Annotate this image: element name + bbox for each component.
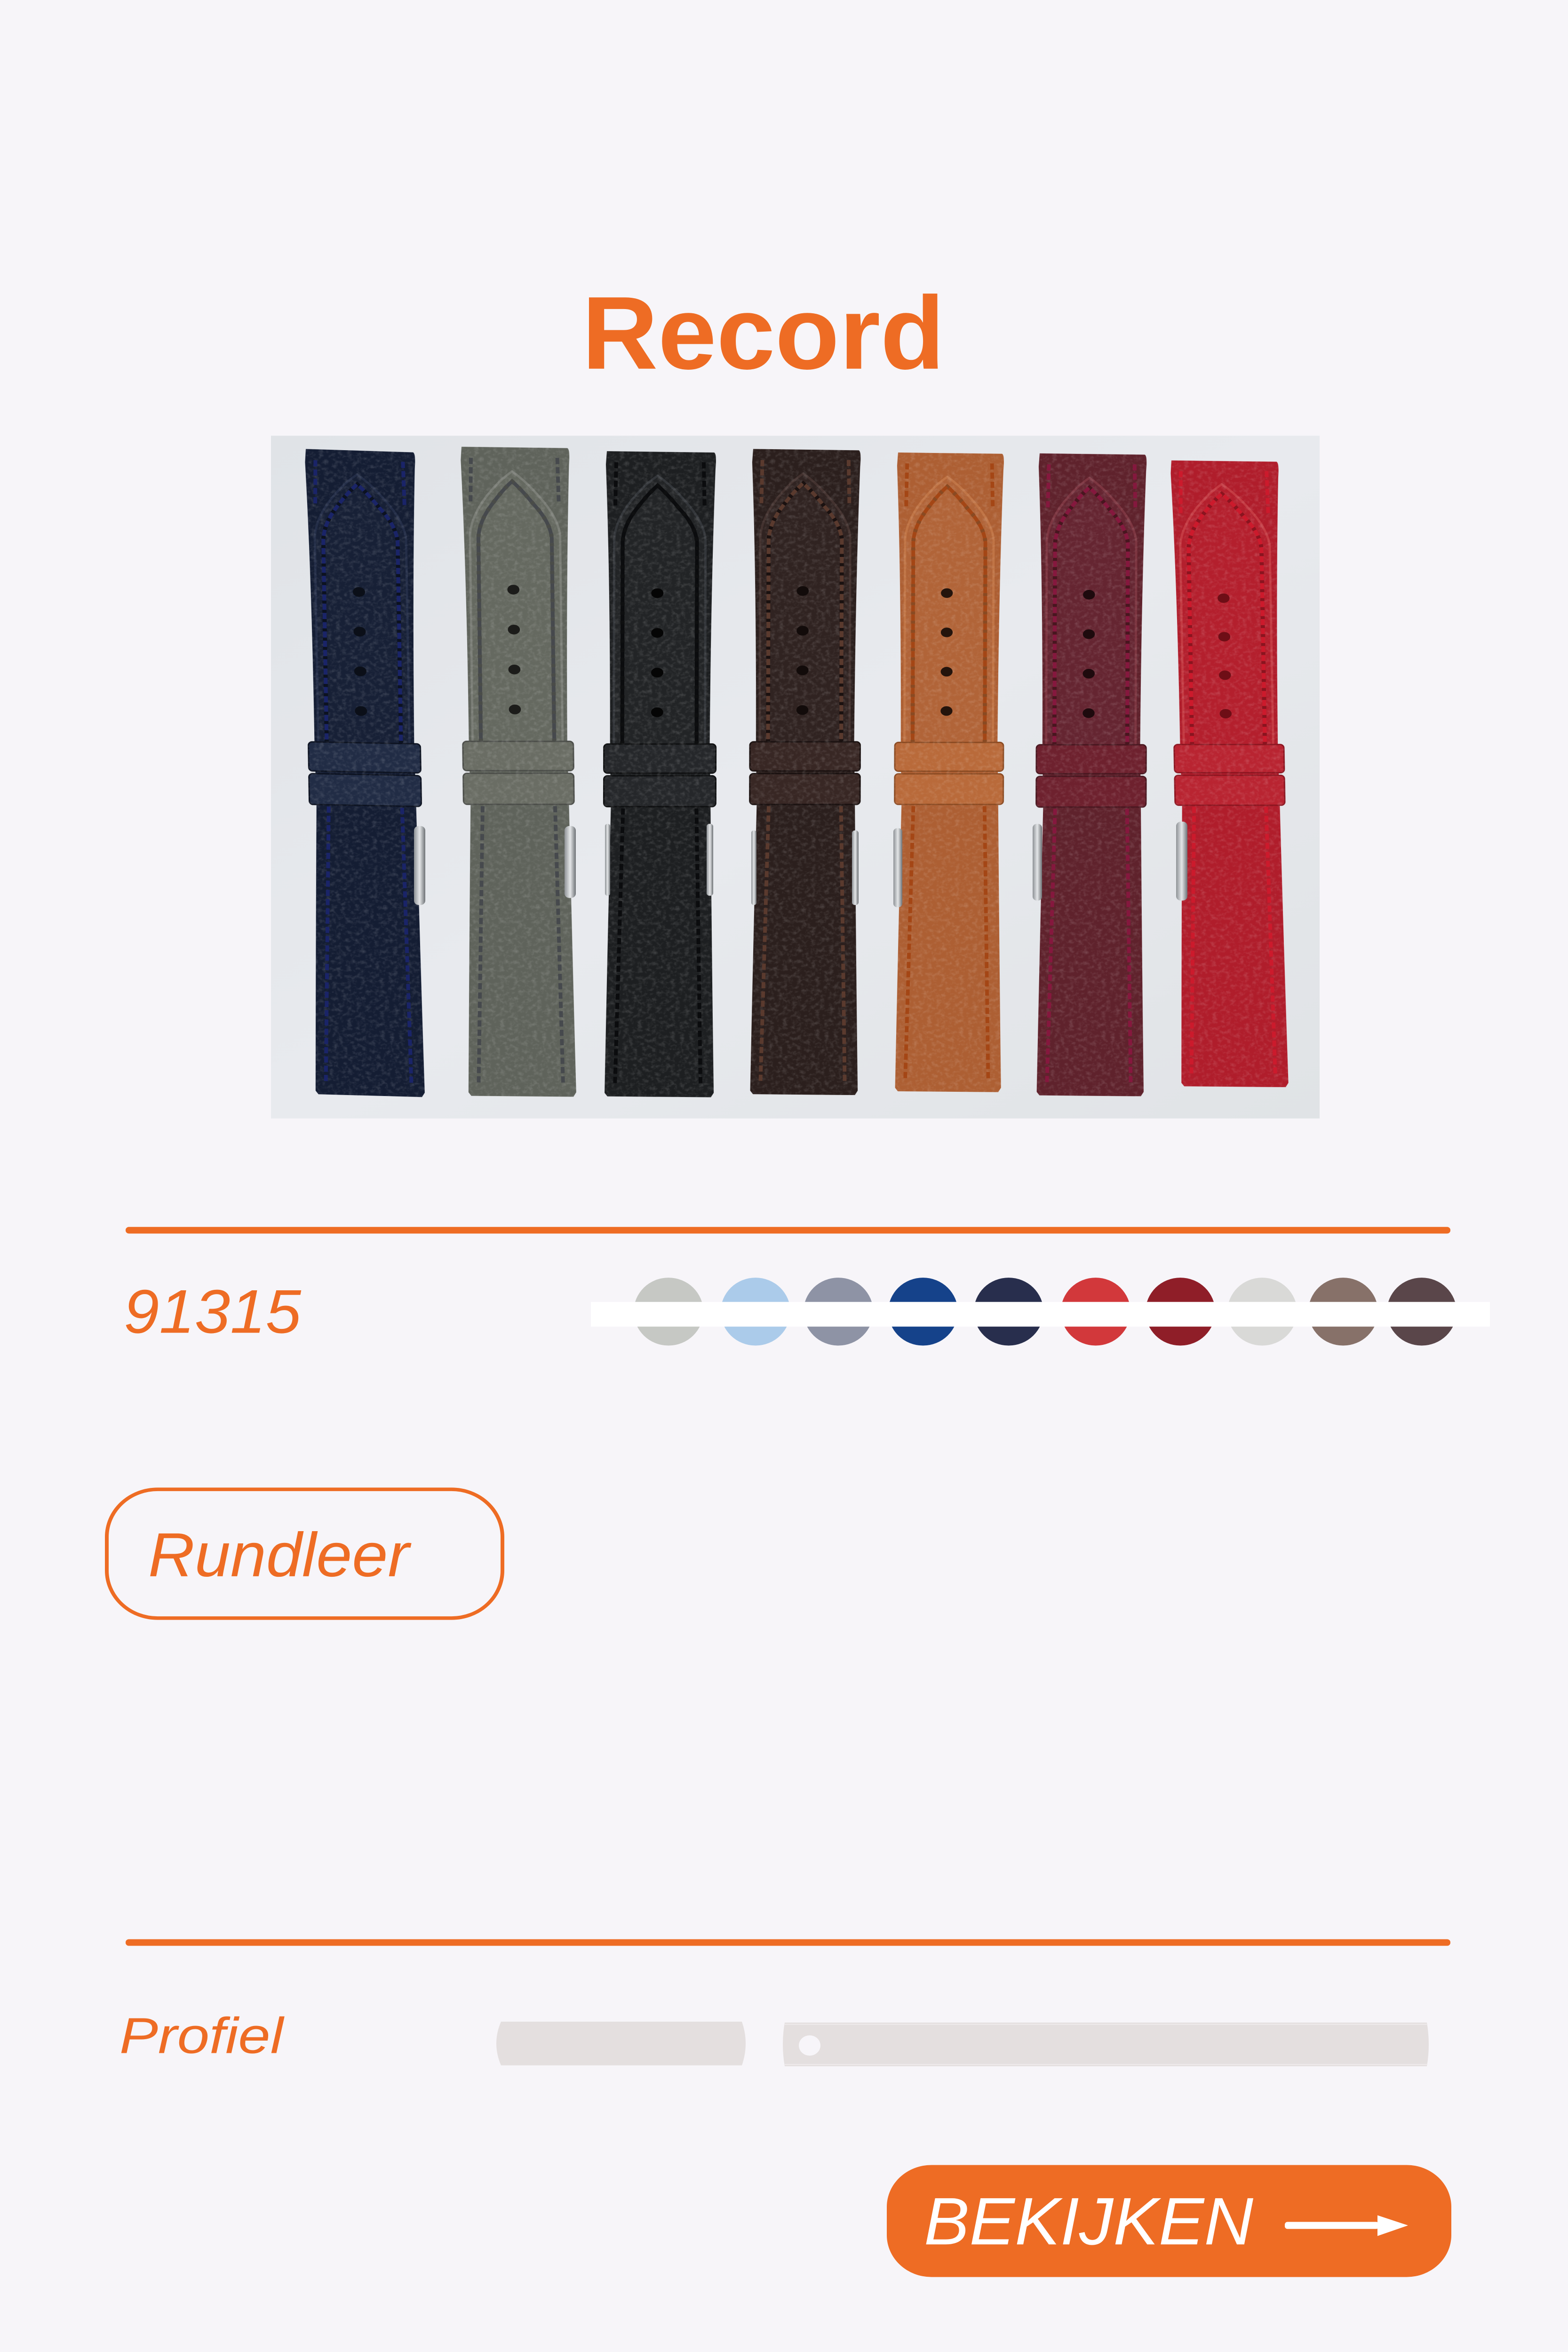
strap: navy — [303, 449, 426, 1097]
bottom divider rule — [126, 1939, 1450, 1946]
product photo: seven leather watch straps — [271, 436, 1320, 1119]
button: BEKIJKEN: BEKIJKEN — [924, 2185, 1254, 2259]
colour swatches — [591, 1278, 1490, 1345]
top divider rule — [126, 1227, 1450, 1233]
icon: arrow — [1285, 2215, 1408, 2236]
strap: dark brown — [749, 449, 861, 1095]
strap: cognac — [893, 453, 1004, 1092]
button: BEKIJKEN — [887, 2165, 1451, 2277]
material tag: Rundleer: Rundleer — [148, 1520, 412, 1589]
strap: red — [1169, 461, 1290, 1087]
article number: 91315 — [124, 1277, 302, 1346]
profile bar: long with dot — [783, 2023, 1429, 2066]
profile label: Profiel — [119, 2007, 285, 2064]
profile bar: short — [496, 2022, 746, 2066]
strap: burgundy — [1033, 453, 1147, 1096]
material tag: Rundleer — [107, 1489, 502, 1618]
title: Record — [582, 276, 945, 391]
strap: grey — [459, 447, 578, 1097]
strap: black — [603, 451, 716, 1097]
